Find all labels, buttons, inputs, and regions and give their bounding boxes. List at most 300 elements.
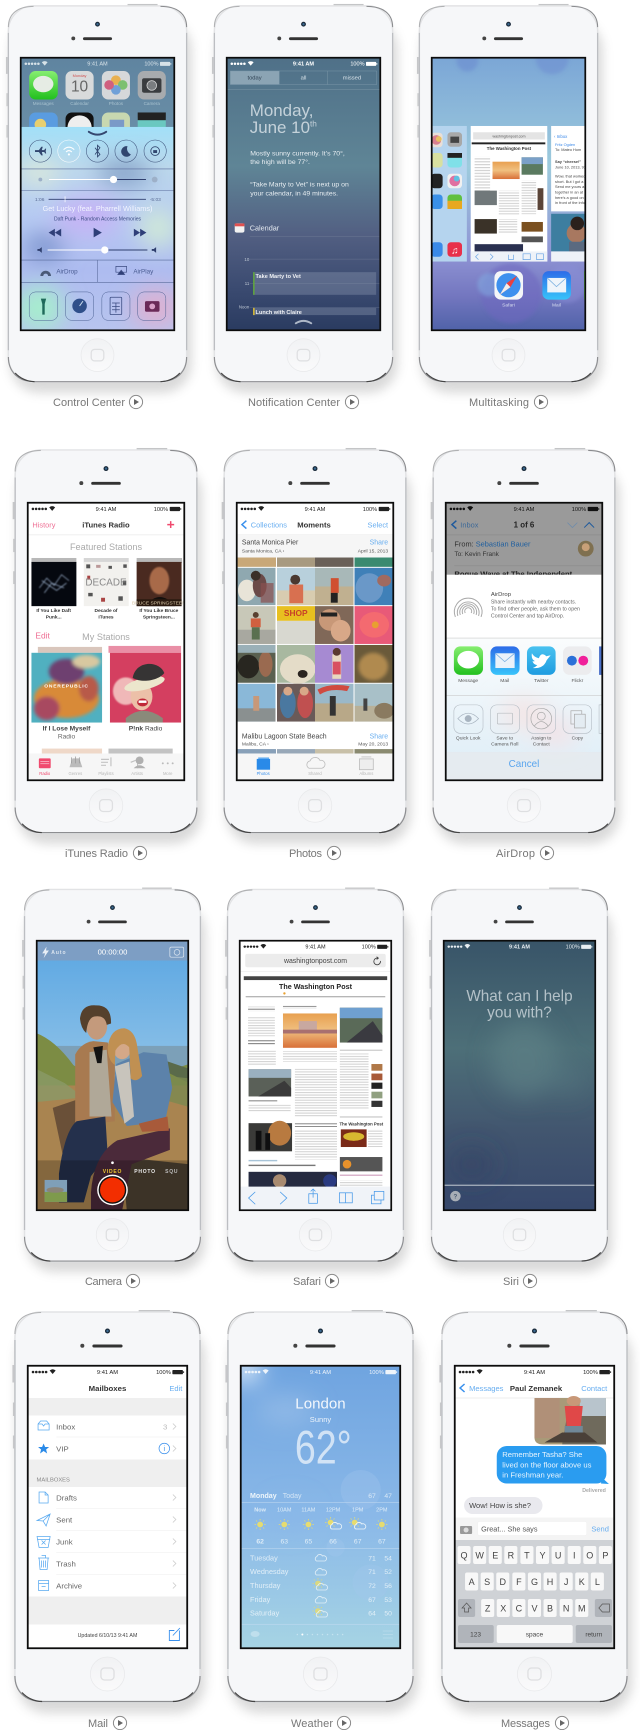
action buttons: Contact — [533, 742, 550, 748]
keyboard: U — [555, 1551, 561, 1560]
mailbox rows — [56, 1423, 176, 1590]
airdrop info: To find other people, ask them to open — [491, 607, 580, 613]
blue bubble: in Freshman year. — [502, 1471, 563, 1479]
phone: airdrop — [431, 448, 620, 844]
tab bar: Playlists — [98, 771, 114, 776]
keyboard: R — [508, 1551, 515, 1560]
app icons: Twitter — [534, 678, 549, 684]
cancel button: Cancel — [509, 759, 539, 770]
daily forecast: Thursday — [250, 1581, 281, 1590]
bottom bar — [251, 1631, 393, 1638]
daily forecast: Tuesday — [250, 1554, 278, 1562]
screen: photos moments: 9:41 AM — [305, 507, 326, 513]
today row: 67 — [368, 1493, 376, 1500]
screen: siri prompt — [443, 940, 596, 1211]
photo message — [534, 1396, 606, 1444]
screen: photos moments — [236, 502, 394, 781]
screen: itunes radio: Edit — [35, 631, 51, 641]
phone body — [439, 1310, 632, 1713]
screen frame — [28, 1366, 187, 1648]
phone body — [12, 1310, 205, 1713]
my stations albums: P!nk Radio — [129, 725, 163, 732]
section header: Malibu: Malibu, CA › — [242, 742, 269, 748]
keyboard: G — [531, 1577, 538, 1587]
dimmed mail header: 1 of 6 — [514, 521, 535, 530]
tab bar: Radio — [39, 771, 51, 776]
daily forecast: 50 — [384, 1611, 392, 1617]
date and summary: Monday, — [250, 101, 313, 120]
blue bubble: Remember Tasha? She — [502, 1450, 582, 1459]
address bar: washingtonpost.com — [283, 958, 347, 965]
mailbox rows: i — [164, 1446, 166, 1453]
nav bar: Collections — [251, 521, 287, 530]
card: home screen: ♫ — [451, 245, 458, 256]
label: Weather: Weather — [291, 1718, 333, 1730]
hourly forecast: 62 — [256, 1539, 264, 1545]
screen: itunes radio: 9:41 AM — [96, 507, 117, 513]
screen frame — [227, 58, 380, 330]
phone body — [13, 448, 202, 844]
screen: control center overlay: 9:41 AM — [87, 62, 108, 68]
phone: multitasking — [417, 4, 602, 393]
screen: notifications — [226, 57, 381, 331]
help button — [450, 1191, 461, 1201]
screen: itunes radio — [27, 502, 186, 781]
card: safari: washingtonpost.com — [493, 135, 525, 139]
screen: weather: 9:41 AM — [310, 1370, 331, 1376]
screen: notifications: 9:41 AM — [293, 62, 314, 68]
nav bar — [28, 521, 184, 535]
mailbox rows: Trash — [56, 1560, 76, 1568]
phone: messages — [439, 1310, 632, 1713]
screen: camera viewfinder — [36, 940, 189, 1211]
home screen icons behind panel — [29, 71, 166, 127]
mailbox rows: Drafts — [56, 1494, 77, 1502]
share sheet — [446, 574, 602, 752]
home screen icons behind panel: Photos — [109, 101, 124, 106]
keyboard: M — [578, 1604, 586, 1613]
top bar — [36, 940, 189, 961]
card: safari — [471, 126, 547, 262]
calendar section: Take Marty to Vet — [256, 274, 301, 280]
nav bar: Moments — [297, 521, 331, 530]
tab bar — [27, 753, 185, 781]
screen: control center overlay — [15, 57, 180, 331]
phone body — [431, 448, 620, 844]
tabs: all — [301, 76, 306, 82]
keyboard: S — [484, 1577, 490, 1587]
nav bar: Select — [368, 521, 388, 530]
mailbox rows: Sent — [56, 1516, 73, 1524]
bottom controls — [36, 1160, 189, 1211]
nav bar — [89, 1384, 183, 1393]
screen frame — [241, 1366, 400, 1648]
featured albums: iTunes — [98, 614, 114, 620]
date and summary — [250, 101, 349, 197]
dimmed mail header: From: Sebastian Bauer — [454, 540, 531, 549]
label: Weather — [291, 1716, 351, 1730]
phone body — [6, 4, 191, 393]
keyboard: A — [469, 1577, 475, 1587]
phone body — [429, 888, 612, 1272]
hourly forecast: 1PM — [352, 1508, 364, 1513]
app icons: Message — [458, 678, 478, 684]
screen: messages: 100% — [583, 1370, 598, 1376]
screen: siri prompt: 9:41 AM — [509, 945, 530, 951]
home screen icons behind panel: 10 — [71, 79, 88, 96]
mailbox rows: Archive — [56, 1582, 82, 1590]
dock apps — [494, 271, 589, 308]
my stations albums: Radio — [58, 734, 75, 741]
featured albums: Decade of — [94, 608, 118, 614]
screen: mailboxes: MAILBOXES — [37, 1478, 70, 1483]
bottom controls: SQU — [165, 1169, 178, 1175]
label: Multitasking: Multitasking — [469, 397, 529, 409]
phone: camera — [22, 888, 205, 1272]
hourly forecast: Now — [254, 1508, 267, 1513]
daily forecast: 71 — [368, 1556, 376, 1562]
keyboard: F — [516, 1577, 522, 1587]
control panel: 1:06 — [35, 197, 45, 203]
nav bar: Contact — [581, 1384, 608, 1393]
home screen icons behind panel: Monday — [73, 74, 87, 78]
footer: Updated 6/10/13 9:41 AM — [78, 1633, 137, 1639]
label: Safari — [293, 1274, 339, 1288]
keyboard: W — [475, 1551, 484, 1560]
phone body — [22, 888, 205, 1272]
label: Photos — [289, 846, 341, 860]
keyboard: B — [547, 1604, 553, 1613]
featured albums: If You Like Bruce — [139, 608, 179, 614]
today row: Monday — [250, 1493, 277, 1500]
keyboard: I — [573, 1551, 575, 1560]
label: Siri: Siri — [503, 1276, 519, 1288]
dock apps: Mail — [552, 302, 561, 308]
daily forecast — [250, 1554, 392, 1617]
hourly forecast — [254, 1508, 388, 1545]
card: safari: The Washington Post — [487, 146, 532, 151]
newspaper page — [244, 976, 387, 1188]
city and temperature: London — [295, 1396, 346, 1412]
app icons — [454, 646, 603, 684]
screen: messages — [454, 1365, 615, 1649]
label: iTunes Radio — [65, 846, 147, 860]
section header: Malibu: Share — [370, 734, 388, 741]
daily forecast: 56 — [384, 1583, 392, 1590]
card: mail — [551, 126, 584, 262]
tab bar: Genres — [69, 771, 82, 776]
tab bar: More — [163, 771, 173, 776]
label: Notification Center: Notification Center — [248, 397, 340, 409]
label: Photos: Photos — [289, 848, 322, 860]
input bar: Send — [591, 1525, 609, 1533]
hourly forecast: 67 — [354, 1539, 362, 1545]
phone: mail — [12, 1310, 205, 1713]
keyboard: Y — [540, 1551, 546, 1560]
hourly forecast: 2PM — [376, 1508, 388, 1513]
label: Safari: Safari — [293, 1276, 321, 1288]
card: mail: To: Mateo Hom — [555, 148, 581, 152]
action buttons: Copy — [572, 736, 584, 742]
blue bubble: lived on the floor above us — [502, 1461, 592, 1469]
cancel button — [445, 752, 603, 781]
screen frame — [455, 1366, 614, 1648]
mailbox rows: Junk — [56, 1538, 73, 1546]
keyboard: C — [516, 1604, 523, 1613]
calendar section: 10 — [244, 257, 250, 262]
daily forecast: 54 — [384, 1556, 392, 1562]
card: mail: Say “cheese!” — [555, 160, 581, 164]
today row: Today — [283, 1493, 302, 1500]
app icons: Mail — [500, 678, 509, 684]
screen: weather: 100% — [369, 1370, 384, 1376]
input bar: Great... She says — [481, 1525, 538, 1533]
help button: ? — [454, 1194, 458, 1201]
label: Camera — [85, 1274, 140, 1288]
phone body — [225, 1310, 418, 1713]
bottom controls: PHOTO — [134, 1169, 156, 1175]
daily forecast: 53 — [384, 1597, 392, 1604]
date and summary: th — [310, 119, 317, 128]
screen: weather — [230, 1352, 401, 1649]
calendar section: Calendar — [250, 224, 280, 233]
card: mail: in front of the info — [555, 201, 585, 205]
label: AirDrop — [496, 846, 554, 860]
phone body — [212, 4, 397, 393]
daily forecast: 71 — [368, 1569, 376, 1576]
hourly forecast: 12PM — [326, 1508, 341, 1513]
keyboard: P — [602, 1551, 608, 1560]
home screen icons behind panel: Camera — [144, 101, 160, 106]
tabs: missed — [343, 76, 361, 82]
screen: notifications: 100% — [350, 62, 365, 68]
airdrop info: AirDrop — [491, 592, 512, 598]
card: mail: Send me yours a — [555, 185, 585, 189]
screen frame — [37, 941, 188, 1210]
screen frame — [444, 941, 595, 1210]
my stations albums — [31, 646, 181, 754]
calendar section: Lunch with Claire — [256, 310, 302, 316]
gray bubble: Wow! How is she? — [469, 1501, 531, 1510]
tab bar: Albums — [359, 771, 373, 776]
screen frame — [240, 941, 391, 1210]
featured albums: If You Like Daft — [36, 608, 71, 614]
siri question: you with? — [487, 1005, 552, 1022]
app icons: Flickr — [571, 678, 584, 684]
date and summary: Mostly sunny currently. It’s 70°, — [250, 149, 345, 157]
top bar: 00:00:00 — [98, 947, 127, 956]
screen: safari page — [239, 940, 392, 1211]
card: mail: ‹ Inbox — [554, 134, 568, 139]
card: home screen — [431, 126, 467, 262]
dimmed mail header: Rogue Wave at The Independent — [454, 570, 573, 579]
screen: mailboxes — [27, 1365, 188, 1649]
featured albums — [31, 558, 186, 620]
screen frame — [21, 58, 174, 330]
screen frame — [28, 503, 184, 780]
keyboard: D — [500, 1577, 507, 1587]
featured albums: Springsteen... — [143, 614, 175, 620]
city and temperature — [295, 1396, 352, 1474]
home screen icons behind panel: Messages — [33, 101, 54, 106]
screen: itunes radio: My Stations — [82, 632, 130, 642]
keyboard: Z — [485, 1604, 491, 1613]
screen frame — [432, 58, 585, 330]
card: mail: here's a good on — [555, 196, 584, 200]
input bar — [456, 1518, 613, 1540]
screen: itunes radio: Featured Stations — [70, 542, 143, 552]
screen: messages: 9:41 AM — [524, 1370, 545, 1376]
label: Control Center: Control Center — [53, 397, 125, 409]
keyboard: T — [524, 1551, 530, 1560]
date and summary: June 10 — [250, 118, 310, 137]
tab bar — [236, 753, 394, 781]
dimmed mail header: To: Kevin Frank — [454, 551, 500, 558]
section header: Santa Monica: Santa Monica Pier — [242, 540, 299, 547]
phone: weather — [225, 1310, 418, 1713]
section header: Santa Monica: Santa Monica, CA › — [242, 549, 285, 555]
keyboard: L — [595, 1577, 600, 1587]
top bar: Auto — [51, 950, 67, 956]
featured albums: BRUCE SPRINGSTEEN — [132, 601, 186, 607]
date and summary: your calendar, in 49 minutes. — [250, 190, 338, 197]
newspaper page: The Washington Post — [279, 983, 353, 991]
mailbox rows: VIP — [56, 1445, 69, 1453]
home screen icons behind panel: Calendar — [70, 101, 89, 106]
city and temperature: Sunny — [310, 1415, 331, 1424]
keyboard: N — [563, 1604, 569, 1613]
airdrop info — [454, 592, 580, 619]
daily forecast: 52 — [384, 1569, 392, 1576]
keyboard: K — [579, 1577, 585, 1587]
airdrop info: Share instantly with nearby contacts. — [491, 600, 576, 606]
label: AirDrop: AirDrop — [496, 848, 535, 860]
nav bar: History — [32, 521, 56, 530]
nav bar: iTunes Radio — [82, 521, 130, 530]
featured albums: Punk... — [46, 614, 62, 620]
daily forecast: 64 — [368, 1611, 376, 1617]
section header: Malibu: May 20, 2013 — [358, 742, 388, 748]
nav bar: Mailboxes — [89, 1384, 126, 1393]
label: iTunes Radio: iTunes Radio — [65, 848, 128, 860]
hourly forecast: 10AM — [277, 1508, 292, 1513]
label: Messages: Messages — [501, 1718, 550, 1730]
keyboard: 123 — [470, 1632, 481, 1638]
screen: mailboxes: 9:41 AM — [97, 1370, 118, 1376]
screen: itunes radio: 100% — [154, 507, 168, 513]
date and summary: “Take Marty to Vet” is next up on — [250, 181, 349, 188]
featured albums: DECADE — [85, 578, 127, 588]
screen: app switcher — [431, 42, 589, 331]
nav bar — [237, 521, 393, 535]
screen: siri prompt: 100% — [566, 945, 580, 951]
section header: Santa Monica: April 15, 2013 — [358, 549, 388, 555]
label: Messages — [501, 1716, 569, 1730]
photo: couple on bench — [36, 940, 189, 1211]
action buttons: Camera Roll — [491, 742, 518, 748]
airdrop info: Control Center and tap AirDrop. — [491, 613, 564, 619]
action buttons: Save to — [496, 736, 513, 742]
address bar — [239, 954, 392, 971]
phone: photos — [222, 448, 411, 844]
date and summary: the high will be 77°. — [250, 158, 310, 166]
nav bar — [456, 1384, 613, 1398]
keyboard: space — [526, 1632, 544, 1638]
control panel: AirPlay — [133, 269, 154, 276]
screen frame — [446, 503, 602, 780]
my stations albums: ONEREPUBLIC — [44, 684, 89, 690]
hourly forecast: 11AM — [301, 1508, 316, 1513]
keyboard: J — [564, 1577, 568, 1587]
keyboard — [456, 1540, 613, 1649]
tab bar: Photos — [257, 771, 270, 776]
daily forecast: Friday — [250, 1595, 271, 1604]
my stations albums: If I Lose Myself — [43, 725, 91, 732]
screen: control center overlay: 100% — [144, 62, 159, 68]
today row — [242, 1493, 399, 1624]
section header: Malibu: Malibu Lagoon State Beach — [242, 734, 327, 741]
daily forecast: Wednesday — [250, 1567, 289, 1576]
screen: photos moments: 100% — [363, 507, 377, 513]
screen: airdrop share sheet — [445, 502, 603, 781]
city and temperature: 62° — [295, 1422, 352, 1474]
phone: safari — [225, 888, 408, 1272]
nav bar: Paul Zemanek — [510, 1384, 563, 1393]
phone: notification center — [212, 4, 397, 393]
gray bubble — [464, 1497, 543, 1514]
screen: airdrop share sheet: 100% — [572, 507, 586, 513]
phone body — [225, 888, 408, 1272]
tab bar: Shared — [308, 771, 322, 776]
siri question — [466, 988, 573, 1022]
hourly forecast: 65 — [305, 1539, 312, 1545]
tab bar: Artists — [131, 771, 143, 776]
control panel — [15, 127, 180, 331]
phone: control center — [6, 4, 191, 393]
bottom controls: VIDEO — [103, 1169, 122, 1175]
hourly forecast: 63 — [280, 1539, 288, 1545]
control panel: AirDrop — [56, 269, 78, 276]
tabs — [226, 71, 381, 89]
label: Mail — [88, 1716, 127, 1730]
label: Camera: Camera — [85, 1276, 123, 1288]
section header: Santa Monica — [237, 535, 393, 558]
mailbox rows: Inbox — [56, 1423, 75, 1431]
tabs: today — [247, 76, 262, 82]
photo grid — [237, 558, 394, 755]
action buttons: Quick Look — [456, 736, 481, 742]
daily forecast: Saturday — [250, 1609, 280, 1617]
section header: Malibu — [242, 734, 388, 748]
keyboard: O — [586, 1551, 593, 1560]
control panel: Get Lucky (feat. Pharrell Williams) — [43, 204, 152, 213]
today row: 47 — [384, 1493, 392, 1500]
control panel: Daft Punk - Random Access Memories — [54, 217, 142, 223]
action buttons — [454, 705, 603, 748]
keyboard: X — [500, 1604, 506, 1613]
keyboard: E — [492, 1551, 498, 1560]
screen: messages: Delivered — [582, 1488, 606, 1494]
screen: safari page: 9:41 AM — [305, 945, 326, 951]
card: mail: Fritz Ogden — [555, 143, 575, 147]
daily forecast: 72 — [368, 1583, 376, 1590]
mailbox rows: 3 — [163, 1423, 167, 1431]
keyboard: H — [547, 1577, 553, 1587]
card: mail: short. But I got a — [555, 180, 584, 184]
calendar section: Noon — [239, 304, 250, 309]
calendar section — [235, 223, 381, 323]
hourly forecast: 67 — [378, 1539, 386, 1545]
